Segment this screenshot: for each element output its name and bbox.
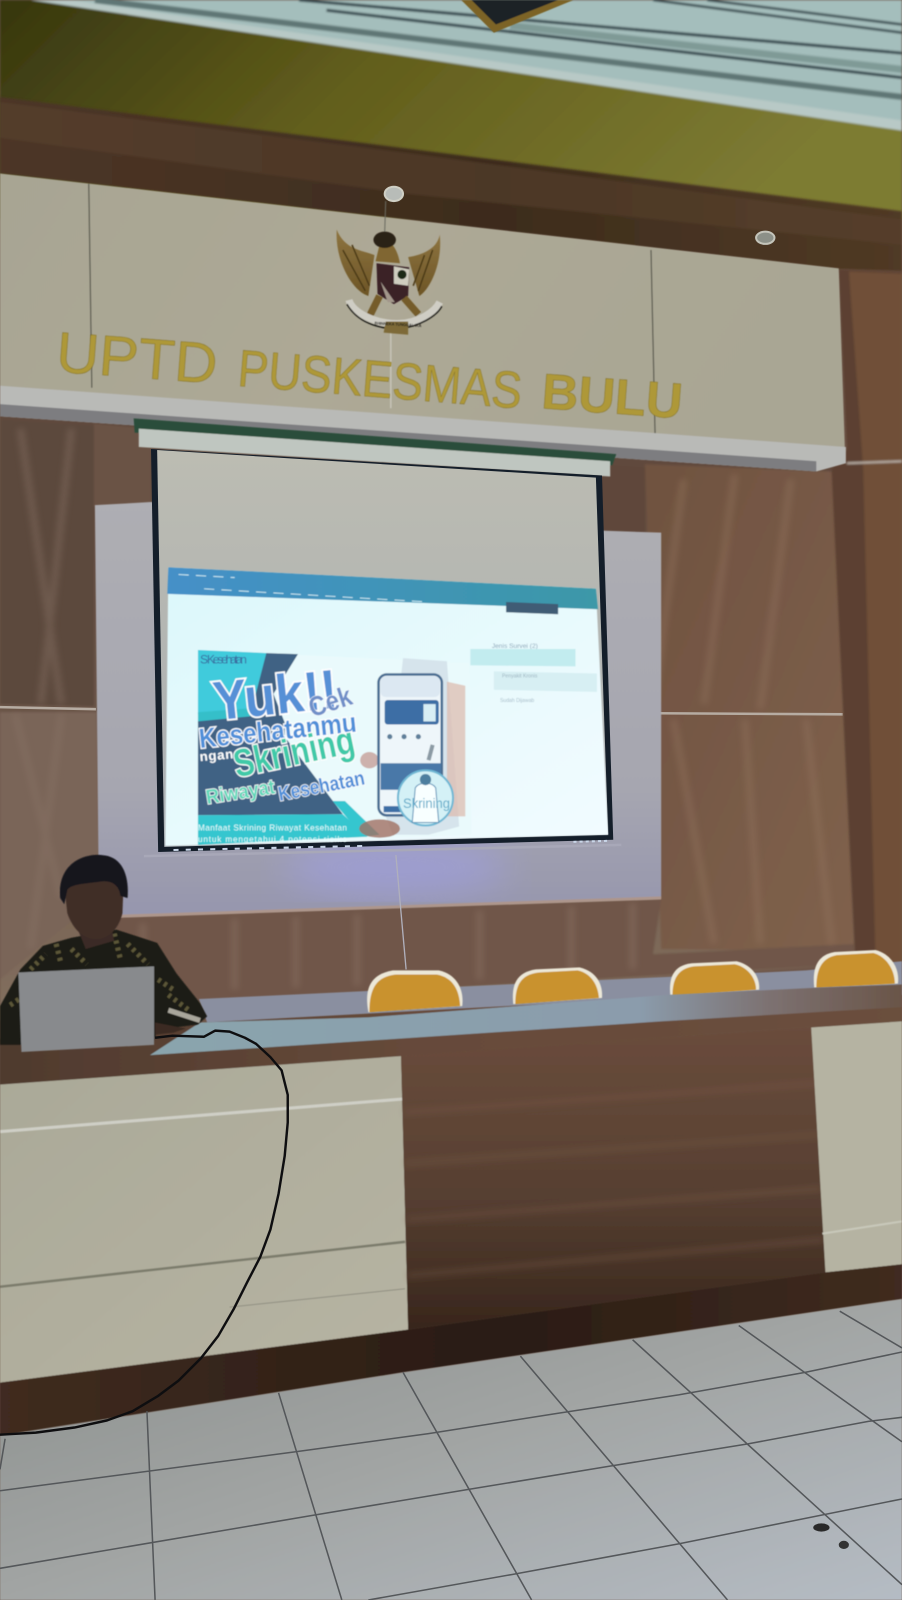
projector screen casing bbox=[134, 418, 616, 477]
hair bbox=[60, 855, 128, 904]
chair 2 bbox=[513, 967, 602, 1004]
sign text: BULU bbox=[540, 363, 685, 429]
page side list: Jenis Survei (2) bbox=[492, 643, 538, 650]
wall rails bbox=[0, 707, 843, 714]
desk plinth bbox=[0, 1264, 902, 1436]
banner image bbox=[197, 650, 471, 845]
desk bbox=[0, 985, 902, 1436]
banner headline text: S Kesehatan bbox=[200, 652, 247, 666]
page side list: Penyakit Kronis bbox=[502, 674, 538, 680]
garuda emblem bbox=[337, 201, 442, 335]
screen bottom tube bbox=[144, 845, 621, 856]
desk wood edge bbox=[0, 985, 902, 1085]
neck and face bbox=[76, 923, 114, 949]
banner headline text: ngan bbox=[199, 746, 234, 764]
sign text bbox=[54, 321, 685, 429]
wood wall bbox=[0, 413, 857, 1020]
garuda emblem: BHINNEKA TUNGGAL IKA bbox=[374, 321, 422, 328]
hand and blurred photo behind phone bbox=[359, 658, 465, 838]
power cable bbox=[0, 1031, 288, 1435]
chair 1 bbox=[367, 970, 463, 1012]
downlight right bbox=[756, 232, 774, 244]
screen cord bbox=[396, 855, 406, 969]
ceiling emblem bbox=[461, 0, 573, 33]
shirt bbox=[0, 930, 207, 1045]
desk left cream panel bbox=[0, 1056, 408, 1383]
projection screen bbox=[144, 449, 621, 856]
banner headline text: Kesehatanmu bbox=[197, 707, 358, 754]
desk top surface bbox=[150, 985, 902, 1055]
right wood pillar bbox=[832, 269, 902, 974]
banner headline text: Kesehatan bbox=[276, 768, 367, 806]
wooden beam bbox=[0, 97, 902, 271]
banner headline text: Riwayat bbox=[204, 776, 277, 809]
banner headline text: Manfaat Skrining Riwayat Kesehatan bbox=[198, 824, 347, 833]
floor bbox=[0, 1299, 902, 1600]
white panel behind screen bbox=[95, 502, 661, 916]
wood grain bbox=[15, 429, 832, 995]
desk centre wood panel bbox=[401, 1028, 825, 1330]
phone mockup bbox=[379, 674, 442, 815]
banner headline text: Skrining bbox=[230, 719, 358, 786]
skrining badge: Skrining bbox=[403, 796, 450, 812]
banner headline text: Yuk!! bbox=[210, 658, 340, 732]
banner headline text: Cek bbox=[305, 680, 356, 723]
chair 3 bbox=[670, 961, 759, 996]
presenter bbox=[0, 855, 207, 1052]
skrining badge bbox=[398, 770, 453, 826]
white strip behind desk bbox=[199, 961, 902, 1029]
page side list: Sudah Dijawab bbox=[500, 698, 534, 704]
projected browser window bbox=[165, 567, 608, 846]
sign text: PUSKESMAS bbox=[236, 340, 524, 421]
ceiling bbox=[0, 0, 902, 219]
chair 4 bbox=[814, 950, 898, 988]
banner headline text bbox=[197, 652, 367, 844]
page side list bbox=[470, 643, 597, 704]
browser tab bar bbox=[167, 567, 598, 614]
cuff bbox=[168, 1010, 200, 1020]
desk right cream panel bbox=[811, 1021, 902, 1272]
downlight left bbox=[385, 187, 403, 201]
laptop bbox=[18, 966, 154, 1052]
sign wall bbox=[0, 173, 846, 471]
taskbar bbox=[173, 846, 367, 850]
sign text: UPTD bbox=[54, 321, 220, 396]
banner headline text: untuk mengetahui 4 potensi risiko bbox=[198, 835, 347, 844]
